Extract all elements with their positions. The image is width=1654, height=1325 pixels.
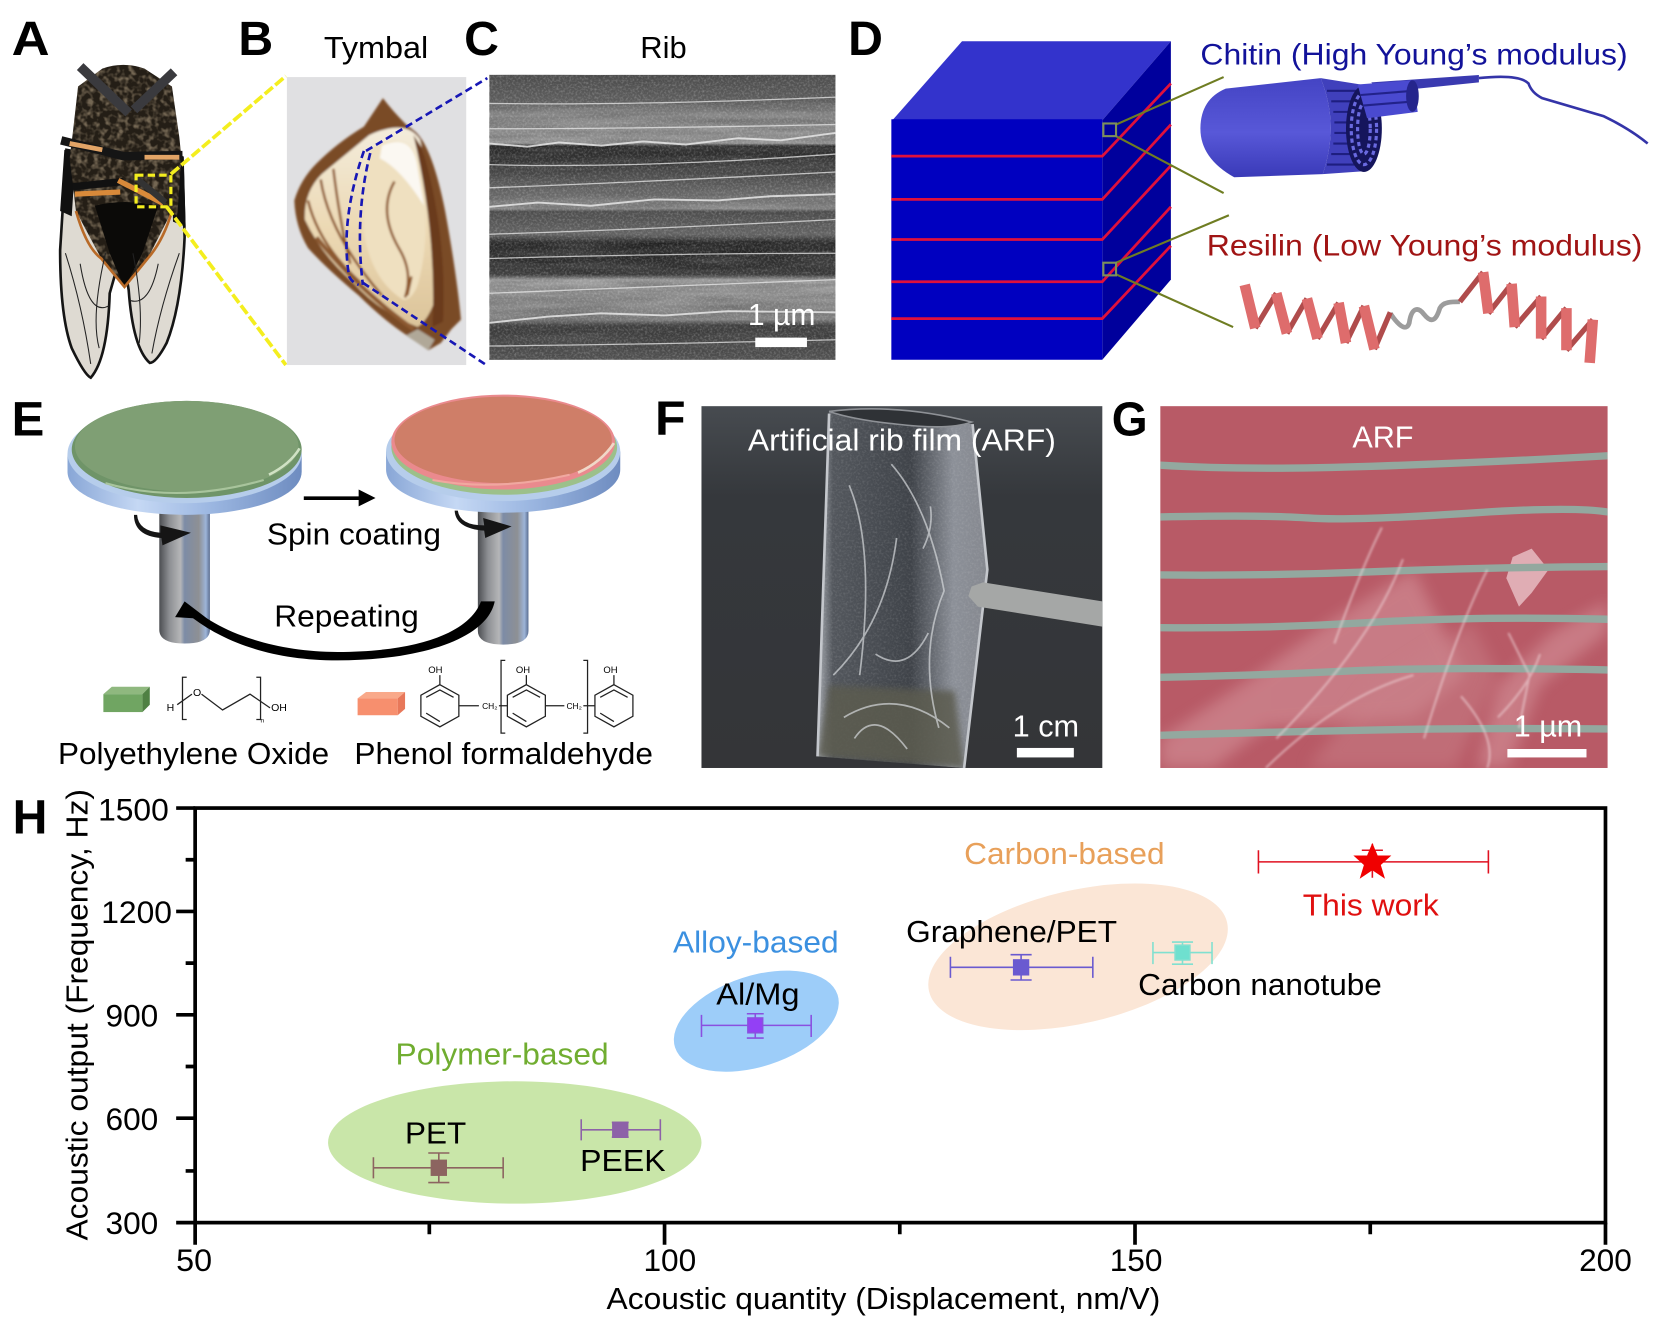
process arrow	[304, 490, 376, 506]
label: Phenol formaldehyde: Phenol formaldehyde	[354, 737, 653, 771]
data point: Carbon nanotube	[1153, 942, 1212, 964]
heading: Rib: Rib	[640, 31, 687, 65]
legend cube: PF	[358, 692, 405, 715]
group label: Carbon-based: Carbon-based	[964, 837, 1165, 871]
group label: Polymer-based: Polymer-based	[396, 1037, 609, 1071]
legend cube: PEO	[103, 687, 150, 712]
label: This work: This work	[1303, 889, 1440, 923]
chemical structure: polyethylene oxide: OH	[271, 702, 287, 714]
panel F: artificial rib film photograph: 1 cm	[1013, 709, 1079, 743]
y axis tick labels: 300	[105, 1205, 158, 1241]
label: PET: PET	[405, 1117, 466, 1151]
label: Polyethylene Oxide: Polyethylene Oxide	[58, 737, 329, 771]
label: Chitin: Chitin (High Young’s modulus)	[1200, 38, 1628, 71]
label: ARF: ARF	[1352, 420, 1413, 454]
y axis tick labels: 600	[105, 1101, 158, 1137]
panel F: artificial rib film photograph	[701, 406, 1102, 770]
rotation arrows	[134, 515, 191, 545]
chemical structure: polyethylene oxide: O	[193, 687, 201, 699]
label: Resilin: Resilin (Low Young’s modulus)	[1207, 229, 1642, 262]
data point: Graphene/PET	[950, 955, 1093, 980]
label: Graphene/PET: Graphene/PET	[906, 915, 1117, 949]
right spinning disk	[386, 395, 620, 513]
illustration: chitin fibre	[1200, 75, 1648, 177]
panel H: scatter chart	[61, 789, 1632, 1316]
label: Spin coating: Spin coating	[267, 517, 441, 551]
chemical structure: phenol formaldehyde	[421, 660, 633, 733]
panel B: tymbal photograph	[287, 77, 466, 365]
data point: Al/Mg	[701, 1014, 811, 1038]
chemical structure: polyethylene oxide: H	[167, 702, 174, 714]
y axis tick labels: 1500	[98, 792, 169, 828]
x axis tick labels	[176, 1242, 1632, 1278]
panel label H: H	[13, 790, 47, 844]
panel E: spin coating schematic	[68, 395, 633, 733]
y axis tick labels: 1200	[101, 894, 172, 930]
panel A: cicada specimen	[60, 61, 188, 378]
label: Artificial rib film (ARF): Artificial rib film (ARF)	[748, 423, 1056, 457]
label: PEEK: PEEK	[580, 1144, 666, 1178]
panel label G: G	[1112, 393, 1148, 447]
x axis tick labels: 100	[643, 1242, 696, 1278]
chemical structure: phenol formaldehyde: CH₂	[482, 701, 498, 711]
panel label C: C	[464, 12, 499, 66]
y axis tick labels: 900	[105, 997, 158, 1033]
label: Al/Mg: Al/Mg	[716, 977, 800, 1011]
yellow zoom box and guide lines	[136, 76, 286, 365]
chemical structure: phenol formaldehyde: OH	[516, 665, 530, 676]
panel G: ARF false-colour micrograph	[1160, 406, 1624, 768]
data point: This work	[1258, 843, 1488, 879]
panel label D: D	[848, 12, 883, 66]
x axis tick labels: 50	[176, 1242, 212, 1278]
group ellipse: polymer-based	[328, 1081, 701, 1204]
chemical structure: phenol formaldehyde: CH₂	[566, 701, 582, 711]
panel G: ARF false-colour micrograph: 1 µm	[1514, 709, 1582, 743]
left spinning disk	[68, 401, 302, 515]
blue dashed tymbal rib outline and guide lines	[346, 78, 487, 365]
panel label A: A	[12, 12, 50, 66]
label: Repeating: Repeating	[274, 600, 419, 634]
chemical structure: polyethylene oxide: n	[261, 718, 265, 725]
group ellipse: alloy-based	[661, 952, 852, 1091]
panel label F: F	[655, 392, 686, 446]
chart axes and ticks	[176, 808, 1605, 1245]
x axis tick labels: 200	[1579, 1242, 1632, 1278]
panel label B: B	[238, 12, 273, 66]
left stem	[159, 496, 210, 644]
panel label E: E	[12, 393, 44, 447]
data point: PET	[373, 1153, 503, 1183]
right stem	[478, 496, 528, 645]
label: Carbon nanotube: Carbon nanotube	[1138, 968, 1382, 1002]
y axis tick labels	[98, 792, 172, 1241]
panel C: rib SEM micrograph	[489, 75, 835, 360]
panel D: layered cube	[891, 41, 1233, 360]
repeating arrow	[175, 601, 495, 660]
x axis tick labels: 150	[1110, 1242, 1162, 1278]
illustration: resilin helix protein	[1245, 272, 1593, 363]
panel C: rib SEM micrograph: 1 µm	[748, 298, 815, 332]
group ellipse: carbon-based	[914, 858, 1242, 1056]
y axis title: Acoustic output (Frequency, Hz)	[61, 789, 95, 1241]
x axis title: Acoustic quantity (Displacement, nm/V)	[607, 1282, 1160, 1316]
chemical structure: polyethylene oxide	[167, 677, 287, 725]
group label: Alloy-based: Alloy-based	[673, 926, 839, 960]
chemical structure: phenol formaldehyde: OH	[603, 665, 618, 676]
data point: PEEK	[581, 1119, 660, 1140]
heading: Tymbal: Tymbal	[324, 31, 428, 65]
chemical structure: phenol formaldehyde: OH	[428, 665, 443, 676]
